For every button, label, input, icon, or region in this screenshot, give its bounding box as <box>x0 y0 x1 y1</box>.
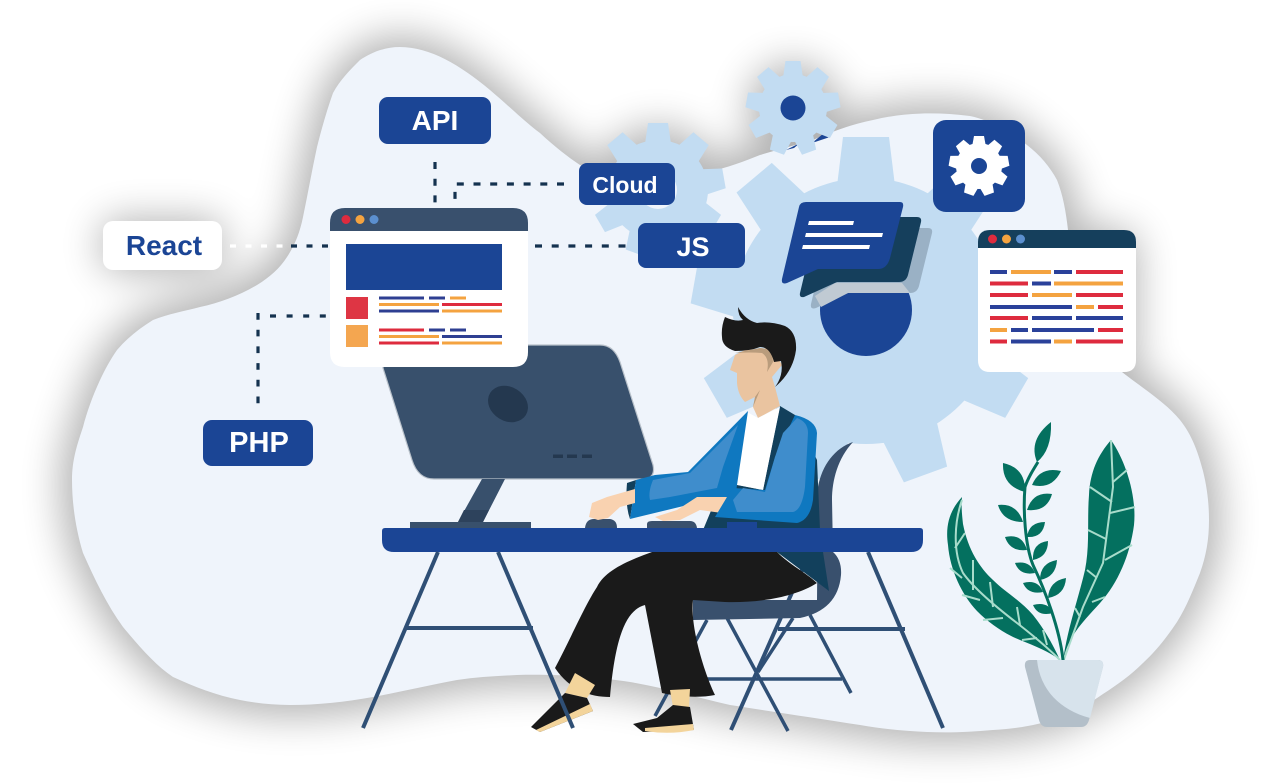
right leaf <box>1063 440 1135 662</box>
chair <box>655 442 853 731</box>
icon: small floating gear <box>745 61 841 156</box>
label: PHP: PHP <box>229 427 289 459</box>
background blob with shadow <box>72 47 1209 732</box>
browser window: left <box>330 208 528 367</box>
icon: settings gear tile <box>933 120 1025 212</box>
speech bubbles <box>782 202 932 308</box>
mouse and keyboard <box>585 519 697 528</box>
desk <box>363 528 923 728</box>
browser window: right <box>978 230 1136 372</box>
shoes <box>531 693 694 733</box>
center stem with leaflets <box>998 422 1066 660</box>
icon: medium gear behind Cloud <box>590 123 726 257</box>
label: Cloud: Cloud <box>592 172 658 198</box>
left leaf <box>947 497 1060 660</box>
t-shirt <box>737 407 780 490</box>
desk legs behind the person <box>731 552 943 730</box>
near hand <box>655 497 727 521</box>
jacket back <box>703 406 829 591</box>
socks <box>565 673 690 707</box>
far arm sleeve <box>626 411 748 519</box>
near arm sleeve <box>715 415 817 523</box>
label: JS: JS <box>676 232 710 262</box>
label: React: React <box>126 230 202 261</box>
gear center circle <box>820 264 912 356</box>
head and neck <box>722 307 796 418</box>
label: API <box>379 97 491 144</box>
label: PHP <box>203 420 313 466</box>
trousers <box>555 552 817 697</box>
plant <box>947 422 1135 727</box>
far hand <box>589 489 635 520</box>
person <box>531 307 829 733</box>
label: API: API <box>412 105 458 136</box>
label: JS <box>638 223 745 268</box>
dashed connector lines <box>230 162 634 405</box>
icon: large gear <box>690 137 1042 484</box>
label: Cloud <box>579 163 675 205</box>
label: React <box>103 221 222 270</box>
monitor <box>383 345 654 529</box>
pot <box>1025 660 1103 727</box>
